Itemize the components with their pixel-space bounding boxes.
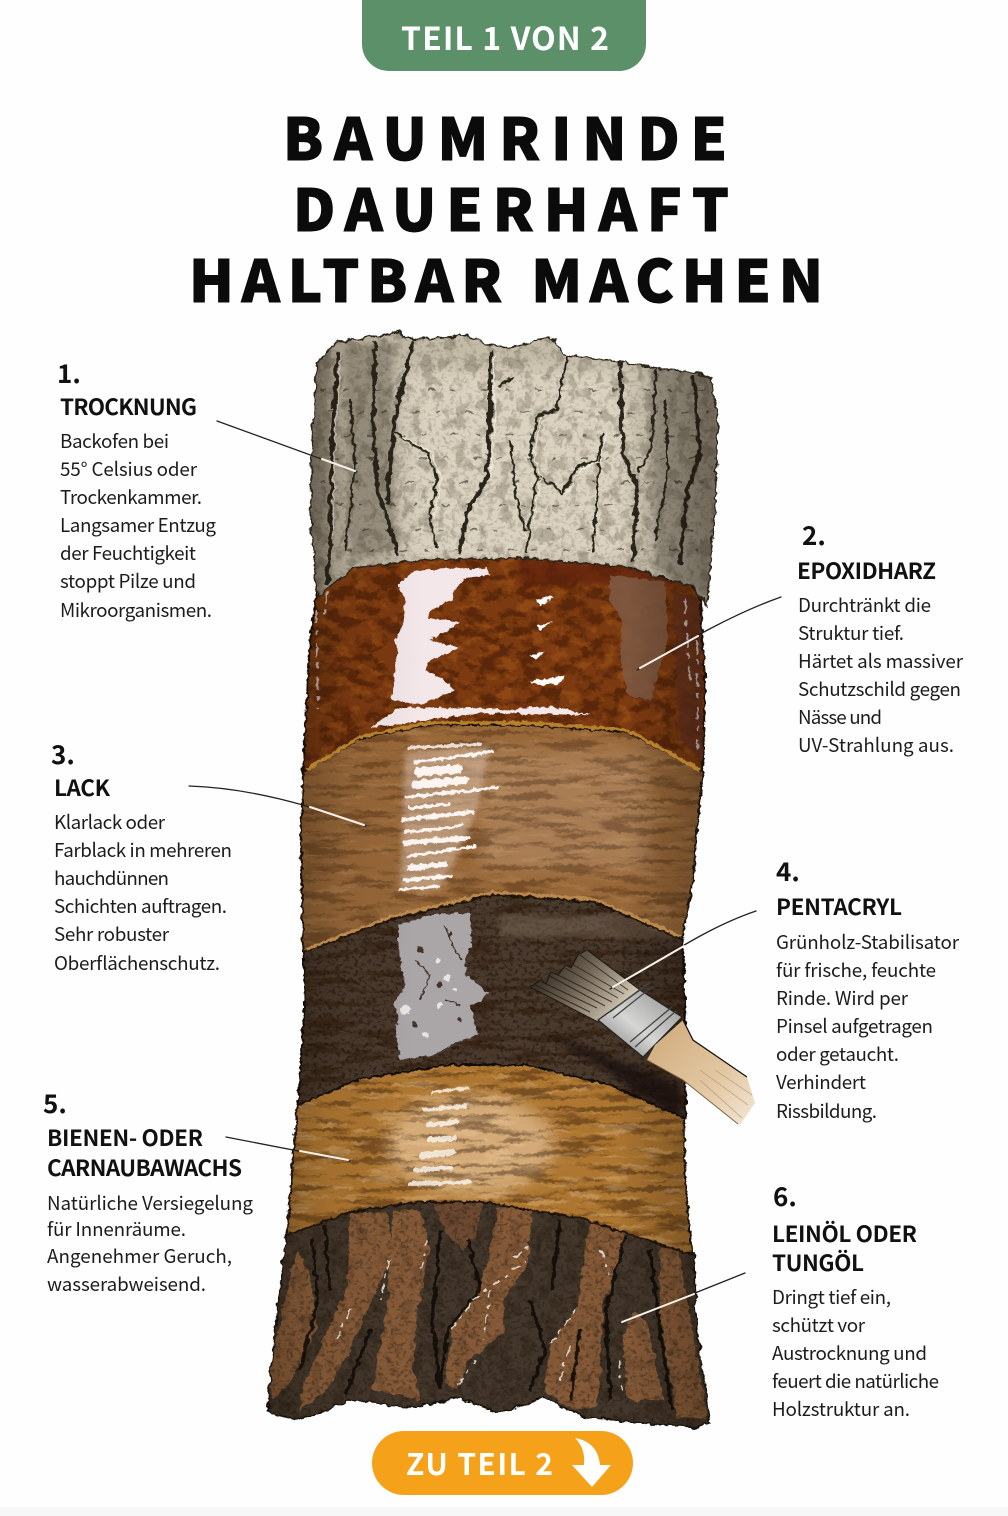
button: next part: ZU TEIL 2 <box>406 1440 553 1484</box>
callout 6: Leinöl oder Tungöl: Dringt tief ein, <box>772 1283 891 1310</box>
illustration: tree trunk with six treated bands <box>260 325 755 1435</box>
callout 1: Trocknung: der Feuchtigkeit <box>60 539 196 566</box>
callout 2: Epoxidharz: Nässe und <box>798 703 882 730</box>
title: HALTBAR MACHEN <box>189 235 823 319</box>
callout 3: Lack: Schichten auftragen. <box>54 892 227 919</box>
callout 2: Epoxidharz: Struktur tief. <box>798 619 904 646</box>
callout 3: Lack: Klarlack oder <box>54 808 166 835</box>
callout 2: Epoxidharz: EPOXIDHARZ <box>797 554 936 586</box>
icon: curved down arrow <box>572 1438 611 1487</box>
callout 3: Lack: Oberflächenschutz. <box>54 949 220 976</box>
callout 4: Pentacryl: Pinsel aufgetragen <box>776 1012 933 1039</box>
callout 2: Epoxidharz: Schutzschild gegen <box>798 675 961 702</box>
callout 3: Lack: Farblack in mehreren <box>54 836 232 863</box>
title <box>189 93 823 319</box>
callout 5: Bienen- oder Carnaubawachs: Angenehmer Geruch, <box>47 1242 232 1269</box>
gloss highlights <box>400 745 490 890</box>
title: BAUMRINDE <box>283 93 727 177</box>
leader lines <box>189 421 781 1323</box>
callout 1: Trocknung <box>57 354 216 623</box>
callout 3: Lack: LACK <box>54 771 111 803</box>
button: next part <box>372 1431 633 1495</box>
band 4: pentacryl on dark bark <box>295 890 690 1125</box>
dark ridges <box>305 345 720 600</box>
callout 4: Pentacryl: Rinde. Wird per <box>776 984 909 1011</box>
band 5: bees or carnauba wax <box>280 1060 700 1260</box>
callout 2: Epoxidharz <box>797 516 964 758</box>
callout 4: Pentacryl: Rissbildung. <box>776 1097 877 1124</box>
callout 6: Leinöl oder Tungöl: Austrocknung und <box>772 1339 927 1366</box>
callout 6: Leinöl oder Tungöl: feuert die natürliche <box>772 1367 939 1394</box>
callout 5: Bienen- oder Carnaubawachs: BIENEN- ODER <box>47 1121 203 1153</box>
amber patch <box>610 575 668 700</box>
callout 5: Bienen- oder Carnaubawachs: 5. <box>43 1084 67 1121</box>
callout 1: Trocknung: TROCKNUNG <box>60 390 197 422</box>
callout 5: Bienen- oder Carnaubawachs: wasserabweisend. <box>47 1270 206 1297</box>
callout 6: Leinöl oder Tungöl: TUNGÖL <box>772 1246 864 1278</box>
callout 3: Lack <box>51 735 232 976</box>
callout 2: Epoxidharz: Durchtränkt die <box>798 591 931 618</box>
callout 4: Pentacryl: PENTACRYL <box>776 890 902 922</box>
callout 6: Leinöl oder Tungöl: Holzstruktur an. <box>772 1395 910 1422</box>
band 2: epoxy resin <box>300 555 710 780</box>
callout 3: Lack: hauchdünnen <box>54 864 169 891</box>
header pill: part label <box>362 0 646 71</box>
callout 1: Trocknung: Mikroorganismen. <box>60 596 212 623</box>
bottom band <box>0 1507 1008 1516</box>
callout 1: Trocknung: 1. <box>57 354 81 391</box>
header pill: part label: TEIL 1 VON 2 <box>401 14 609 60</box>
callout 2: Epoxidharz: Härtet als massiver <box>798 647 964 674</box>
callout 1: Trocknung: stoppt Pilze und <box>60 567 196 594</box>
callout 4: Pentacryl: Verhindert <box>776 1068 866 1095</box>
callout 2: Epoxidharz: 2. <box>802 516 826 553</box>
callout 5: Bienen- oder Carnaubawachs: CARNAUBAWACHS <box>47 1151 242 1183</box>
callout 6: Leinöl oder Tungöl <box>772 1177 939 1422</box>
callout 1: Trocknung: Langsamer Entzug <box>60 511 216 538</box>
callout 5: Bienen- oder Carnaubawachs: für Innenräume. <box>47 1215 186 1242</box>
callout 3: Lack: 3. <box>51 735 75 772</box>
callout 4: Pentacryl: oder getaucht. <box>776 1040 899 1067</box>
callout 1: Trocknung: Trockenkammer. <box>60 483 202 510</box>
callout 6: Leinöl oder Tungöl: schützt vor <box>772 1311 866 1338</box>
title: DAUERHAFT <box>293 164 729 248</box>
callout 6: Leinöl oder Tungöl: LEINÖL ODER <box>772 1217 917 1249</box>
bark cracks <box>320 343 715 583</box>
callout 5: Bienen- oder Carnaubawachs <box>43 1084 253 1297</box>
callout 1: Trocknung: Backofen bei <box>60 427 169 454</box>
silver pentacryl patch <box>393 913 488 1060</box>
epoxy gloss <box>392 568 490 705</box>
callout 4: Pentacryl: 4. <box>776 852 800 889</box>
callout 4: Pentacryl: für frische, feuchte <box>776 956 936 983</box>
callout 1: Trocknung: 55° Celsius oder <box>60 455 198 482</box>
band 1: dried pale bark <box>305 325 725 610</box>
band 6: linseed or tung oil bark <box>260 1190 720 1435</box>
band 3: clear or coloured lacquer <box>295 715 705 955</box>
callout 5: Bienen- oder Carnaubawachs: Natürliche Versiegelung <box>47 1189 253 1216</box>
icon: paint brush <box>530 950 755 1125</box>
callout 2: Epoxidharz: UV-Strahlung aus. <box>798 731 954 758</box>
callout 4: Pentacryl <box>776 852 960 1124</box>
callout 3: Lack: Sehr robuster <box>54 920 170 947</box>
callout 4: Pentacryl: Grünholz-Stabilisator <box>776 928 960 955</box>
callout 6: Leinöl oder Tungöl: 6. <box>773 1177 797 1214</box>
